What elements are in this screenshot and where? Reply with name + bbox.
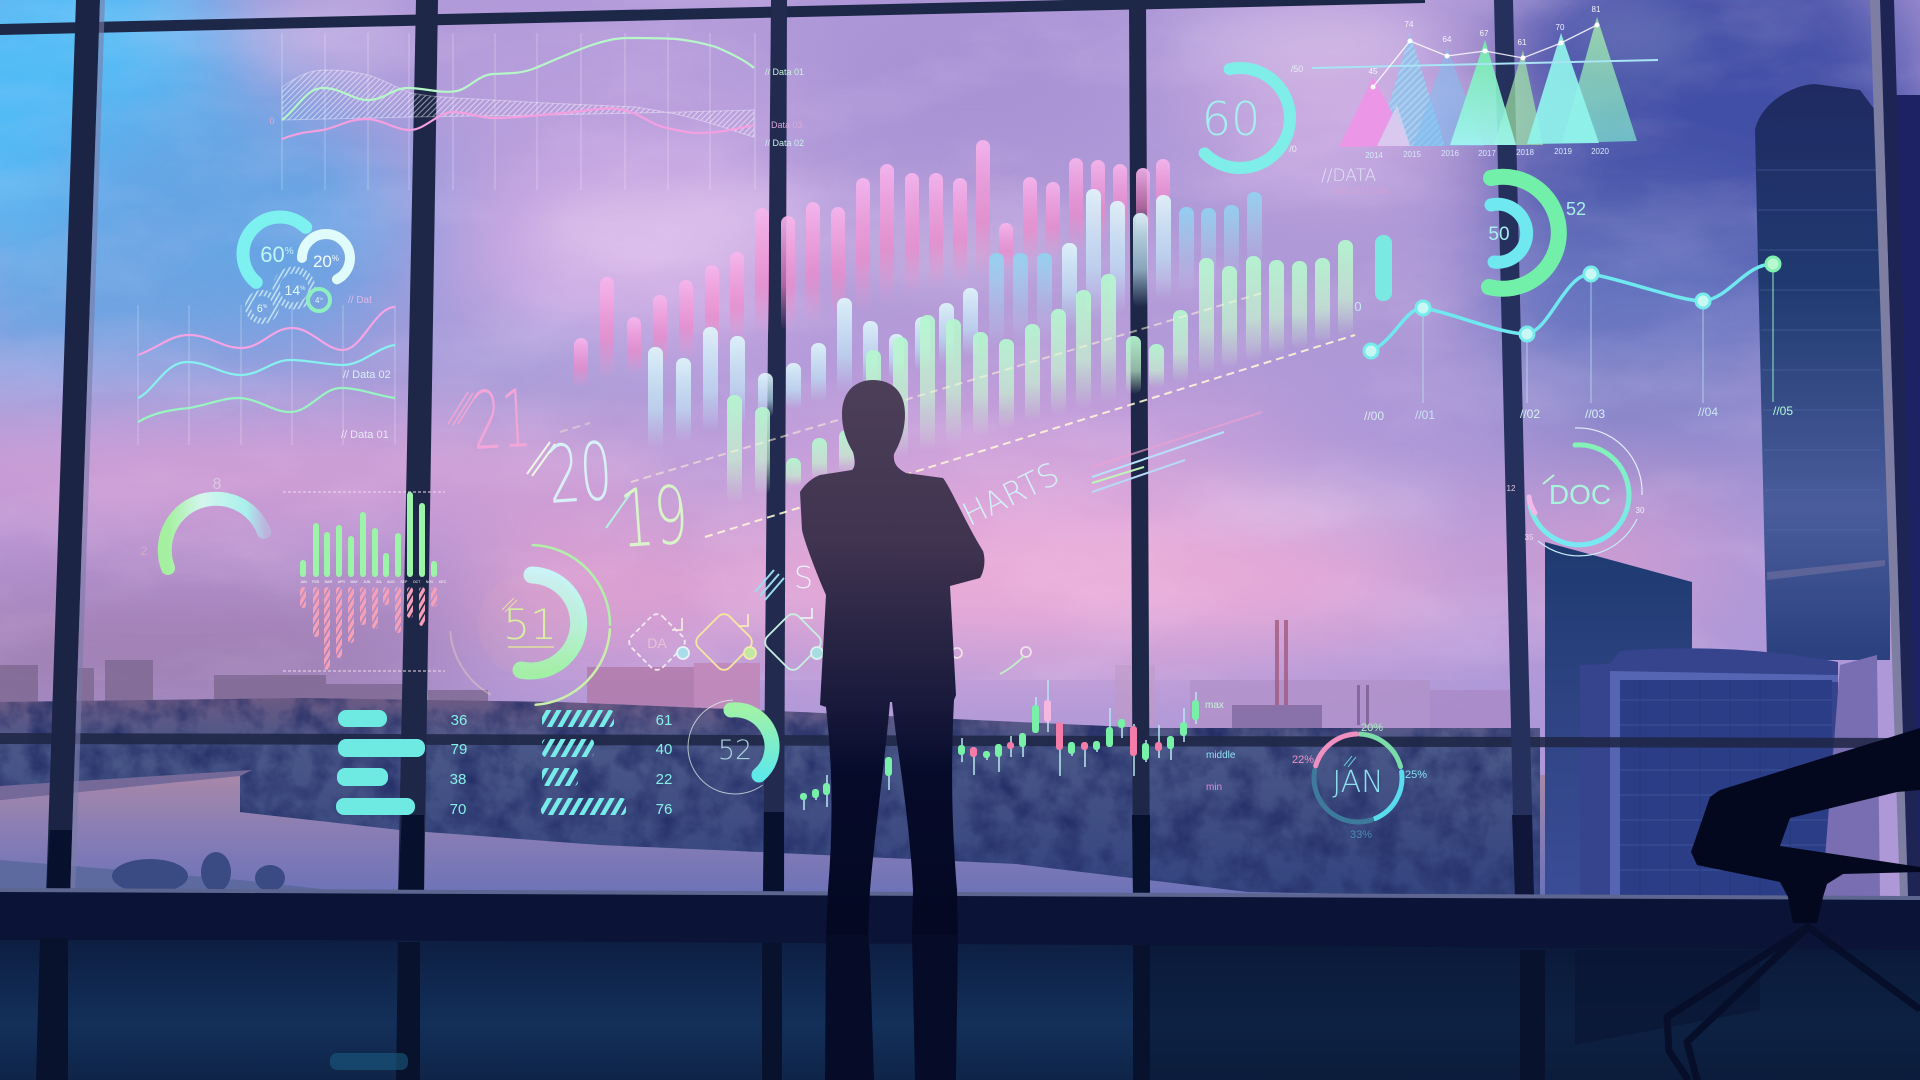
chart: tall cyan scale bar: [1354, 235, 1392, 314]
chart: triangle area chart: 45: [1369, 67, 1378, 76]
background: dark office block: [1545, 542, 1692, 900]
top rail: [0, 0, 1425, 35]
chart: percentage donut cluster: [228, 202, 372, 321]
gauge: double arc 52 and 50: 52: [1566, 199, 1586, 219]
data bars: solid cyan list: 79: [451, 741, 467, 758]
data bars: hatched cyan list: 40: [656, 741, 672, 758]
data bars: hatched cyan list: 76: [656, 801, 672, 818]
label: DATA actual data: //DATA: [1321, 166, 1377, 186]
gauge: ring 60: 60: [1202, 92, 1260, 146]
chart: three wave lines: [138, 305, 395, 445]
4 percent ring: [308, 289, 330, 311]
data bars: solid cyan list: 70: [450, 801, 466, 818]
background: tower: [1755, 84, 1890, 660]
14 percent hatched ring: [276, 270, 312, 306]
person silhouette: [800, 380, 984, 1080]
floor and sill: [0, 888, 1920, 1080]
chart: candlesticks: min: [1206, 782, 1222, 793]
gauge: JAN segmented ring: JAN: [1332, 765, 1384, 800]
gauge: double arc 52 and 50: 50: [1488, 224, 1510, 245]
gauge: ring 60: /0: [1289, 144, 1297, 154]
data bars: hatched cyan list: 61: [656, 712, 672, 729]
chart: percentage donut cluster: 60: [260, 242, 285, 267]
year number 19: [606, 468, 691, 566]
gauge: DOC ring: 35: [1525, 533, 1534, 542]
chart: top-left line chart: // Data 01: [765, 67, 804, 77]
year number 19: 19: [617, 468, 691, 566]
candle wicks: [804, 680, 1196, 810]
chart: cyan line chart with nodes: //03: [1585, 407, 1605, 421]
chart: up and down monthly bars: [283, 492, 447, 671]
data bars: solid cyan list: 38: [450, 771, 466, 788]
chart: top-left line chart: // Data 02: [765, 138, 804, 148]
chart: tall cyan scale bar: 0: [1354, 299, 1362, 314]
gauge: donut 51: 51: [503, 600, 557, 649]
gauge: ring 60: /50: [1291, 64, 1303, 74]
gauge: JAN segmented ring: 20%: [1361, 722, 1383, 734]
green candles: [800, 700, 1199, 800]
chart: cyan line chart with nodes: //02: [1520, 407, 1540, 421]
chart: cyan line chart with nodes: [1364, 257, 1793, 423]
chart: percentage donut cluster: %: [263, 304, 268, 310]
background: curved office block: [1580, 648, 1880, 897]
cloud texture: [0, 0, 1920, 680]
chart: triangle area chart: 2019: [1554, 147, 1572, 156]
background: distant city skyline: [0, 620, 1530, 730]
20 percent arc: [302, 234, 350, 282]
hatched accent and label fragment: S: [794, 561, 813, 596]
value line: [1370, 22, 1600, 90]
year number 21: [448, 372, 533, 468]
chart accents beside CHARTS: [1092, 412, 1262, 492]
outlined diamond: [762, 608, 824, 673]
chart: cyan line chart with nodes: //00: [1364, 409, 1384, 423]
chart: top-left line chart: [269, 33, 804, 190]
6 percent hatched ring: [248, 293, 276, 321]
gauge: half ring 8: 2: [141, 544, 148, 558]
chair silhouette: [1667, 728, 1920, 1080]
hatched accent and label fragment: [755, 561, 813, 600]
chart: percentage donut cluster: 20: [313, 252, 332, 271]
background: wooded river banks: [0, 698, 1540, 897]
pink line: [282, 108, 754, 139]
year number 21: 21: [470, 372, 533, 468]
gauge: half ring 8: 8: [213, 476, 222, 493]
gauge: double arc 52 and 50: [1488, 177, 1586, 289]
hatched area: [282, 70, 754, 137]
dashed trend lines: [560, 293, 1355, 537]
chart: triangle area chart: 61: [1518, 38, 1527, 47]
chart: top-left line chart: 0: [269, 116, 275, 126]
chart: candlesticks: [800, 680, 1236, 810]
chart: triangle area chart: 70: [1556, 23, 1565, 32]
chart: percentage donut cluster: %: [332, 254, 339, 263]
data bars: hatched cyan list: 22: [656, 771, 672, 788]
chart: triangle area chart: [1312, 5, 1658, 160]
chart: percentage donut cluster: 4: [315, 296, 319, 305]
chart: triangle area chart: 2018: [1516, 148, 1534, 157]
gauge: DOC ring: [1507, 428, 1645, 556]
data bars: solid cyan list: 36: [451, 712, 467, 729]
chart: large 3D bars, front green row: [727, 240, 1353, 503]
chart: percentage donut cluster: // Dat: [348, 295, 372, 306]
chart: cyan line chart with nodes: //04: [1698, 405, 1718, 419]
gauge: JAN segmented ring: 22%: [1292, 754, 1314, 766]
chart: large 3D bars, middle white-blue row: [648, 189, 1262, 450]
mullions: [46, 0, 100, 897]
chart: candlesticks: max: [1205, 700, 1224, 711]
gauge: donut 51: [421, 516, 639, 734]
year number 20: 20: [545, 425, 615, 522]
background: river water: [0, 775, 1560, 897]
year number 20: [527, 425, 615, 522]
pink candles: [970, 700, 1162, 757]
gauge: DOC ring: DOC: [1549, 479, 1611, 510]
dashed diamond: [626, 611, 689, 673]
chart: triangle area chart: 74: [1405, 20, 1414, 29]
chart: triangle area chart: 81: [1592, 5, 1601, 14]
chair legs: [1667, 927, 1918, 1080]
chart: triangle area chart: 67: [1480, 29, 1489, 38]
chart: triangle area chart: 2015: [1403, 150, 1421, 159]
chart: triangle area chart: 2014: [1365, 151, 1383, 160]
label: DATA actual data: actual data: [1334, 185, 1389, 197]
chart: percentage donut cluster: %: [300, 286, 306, 292]
gauge: half ring 8: [141, 476, 264, 568]
gauge: DOC ring: 12: [1507, 484, 1516, 493]
chart: three wave lines: // Data 01: [341, 429, 389, 441]
chart: triangle area chart: 64: [1443, 35, 1452, 44]
diagram: linked dashed diamonds: [626, 608, 1031, 674]
gauge: DOC ring: 30: [1636, 506, 1645, 515]
middle rail: [0, 733, 1920, 748]
chart: large 3D bars, rear pink row: [574, 140, 1170, 388]
gauge: JAN segmented ring: [1292, 722, 1427, 841]
floor reflection of bars: [330, 1053, 408, 1070]
gauge: JAN segmented ring: 33%: [1350, 829, 1372, 841]
gauge: ring 52: [671, 683, 799, 811]
chart: triangle area chart: 2020: [1591, 147, 1609, 156]
label: DATA actual data: [1321, 166, 1389, 197]
threshold line: [1312, 60, 1658, 68]
person reflection on the floor: [825, 935, 958, 1080]
chart: triangle area chart: 2017: [1478, 149, 1496, 158]
chart: percentage donut cluster: %: [285, 246, 294, 257]
green line: [282, 38, 754, 120]
chart: top-left line chart: Data 03: [771, 120, 803, 130]
chart: cyan line chart with nodes: //05: [1773, 404, 1793, 418]
chart: three wave lines: // Data 02: [343, 369, 391, 381]
lower dark mullion sections: [46, 830, 72, 897]
chart: triangle area chart: 2016: [1441, 149, 1459, 158]
dashed diamond: DA: [647, 635, 667, 651]
chart: percentage donut cluster: 6: [257, 303, 263, 315]
60 percent arc: [228, 202, 332, 306]
solid diamond: [693, 611, 756, 673]
gauge: JAN segmented ring: 25%: [1405, 769, 1427, 781]
chart: cyan line chart with nodes: //01: [1415, 408, 1435, 422]
gauge: ring 52: 52: [718, 735, 752, 766]
gauge: ring 60: [1181, 59, 1303, 177]
data bars: solid cyan list: [336, 710, 467, 818]
chart: candlesticks: middle: [1206, 750, 1236, 761]
chart: up and down monthly bars: JAN FEB MAR APR MAY JUN JUL AUG SEP OCT NOV DEC: [300, 580, 447, 584]
chart: percentage donut cluster: %: [319, 296, 323, 301]
data bars: hatched cyan list: [541, 710, 672, 818]
chart: percentage donut cluster: 14: [285, 282, 300, 298]
label: CHARTS: CHARTS: [937, 455, 1065, 543]
